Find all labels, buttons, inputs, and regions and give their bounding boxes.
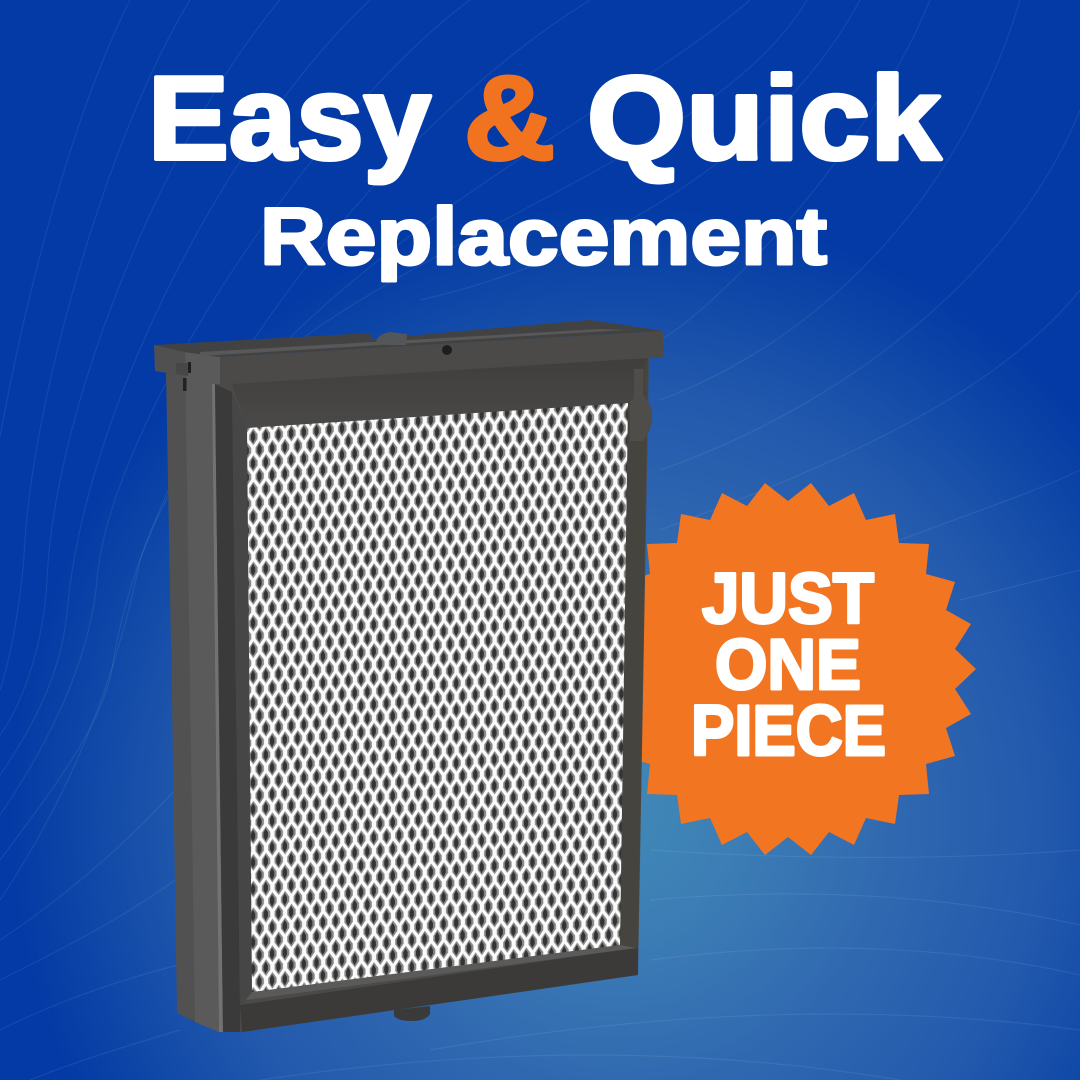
starburst shape	[600, 483, 976, 855]
filter mesh	[247, 403, 628, 992]
filter lid left end	[154, 345, 186, 376]
filter latch	[376, 332, 407, 345]
filter side clip	[176, 363, 188, 376]
badge line: ONE: ONE	[715, 626, 861, 705]
title ampersand: &	[464, 52, 555, 185]
filter front corner face	[185, 352, 220, 1032]
filter bottom drain nub	[394, 1006, 430, 1021]
filter main body	[186, 356, 649, 1032]
filter bottom band	[240, 948, 638, 1032]
filter lid top recess	[154, 320, 663, 357]
filter lid inner strip	[200, 329, 625, 356]
product: replacement filter cartridge	[154, 320, 663, 1032]
badge line: JUST: JUST	[702, 560, 874, 639]
title word: Easy: Easy	[148, 52, 431, 185]
filter top inner band	[232, 358, 648, 428]
filter inner left mid band	[232, 392, 252, 1005]
filter right band	[620, 358, 648, 950]
filter bottom inner ledge	[246, 945, 636, 1000]
title word: Quick: Quick	[587, 52, 942, 185]
filter inner left dark band	[215, 384, 240, 1032]
filter left side panel	[166, 372, 220, 1032]
subtitle: Replacement: Replacement	[260, 192, 827, 282]
filter lid hole	[442, 345, 452, 355]
title: Easy & Quick	[148, 52, 942, 185]
filter knob on right edge	[630, 369, 652, 441]
filter lid front lip	[220, 331, 663, 384]
badge line: PIECE: PIECE	[691, 692, 886, 771]
badge: orange starburst with text	[600, 483, 976, 855]
filter corner highlight	[212, 384, 223, 1032]
badge text	[691, 560, 886, 771]
